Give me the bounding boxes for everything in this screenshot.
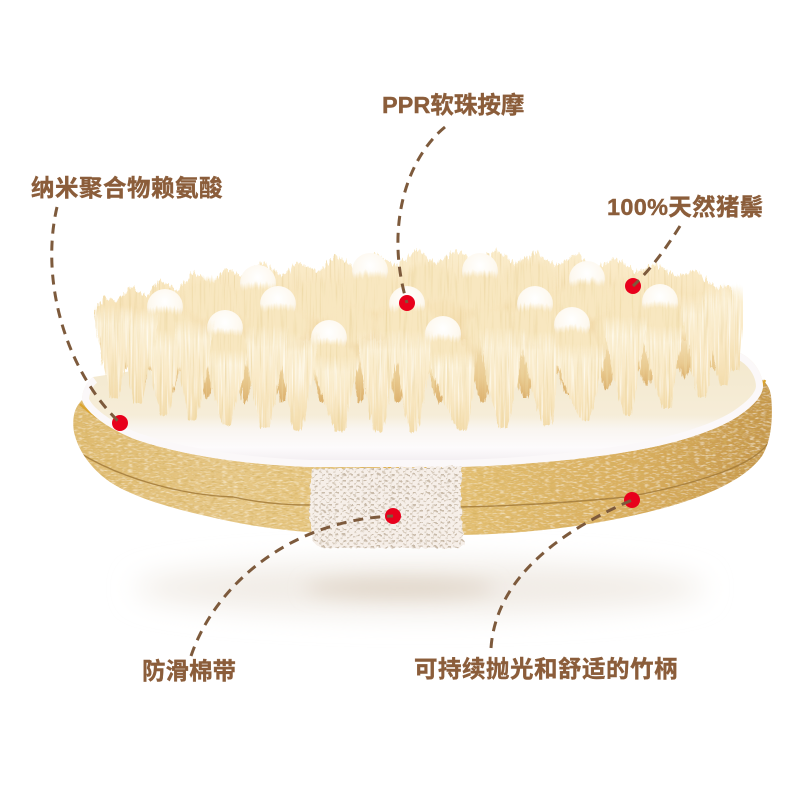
callout: PPR soft beads <box>382 92 524 311</box>
white PPR base plate <box>82 353 763 467</box>
callout: non-slip strap <box>142 508 401 684</box>
marker dot <box>625 278 641 294</box>
marker dot <box>385 508 401 524</box>
label: 纳米聚合物赖氨酸 <box>31 175 223 201</box>
dashed leader <box>52 207 120 423</box>
callout: nano polymer lysine <box>31 175 223 431</box>
label: 100%天然猪鬃 <box>607 194 764 220</box>
label: 可持续抛光和舒适的竹柄 <box>414 656 678 682</box>
dashed leader <box>191 516 393 656</box>
PPR massage beads with surrounding bristles <box>125 253 698 382</box>
marker dot <box>112 415 128 431</box>
dashed leader <box>633 226 680 286</box>
shadow beneath brush <box>135 562 705 614</box>
bamboo handle <box>73 378 772 535</box>
callout: boar bristle <box>607 194 764 294</box>
label: PPR软珠按摩 <box>382 92 524 118</box>
dashed leader <box>398 127 445 303</box>
rear bristle tips <box>126 340 704 402</box>
label: 防滑棉带 <box>142 658 236 684</box>
cotton strap <box>310 466 464 548</box>
dashed leader <box>491 500 632 648</box>
rear bristle mass <box>96 250 738 374</box>
brush illustration <box>73 250 772 548</box>
marker dot <box>399 295 415 311</box>
front bristle tufts <box>94 284 743 432</box>
callout: bamboo handle <box>414 492 678 682</box>
marker dot <box>624 492 640 508</box>
